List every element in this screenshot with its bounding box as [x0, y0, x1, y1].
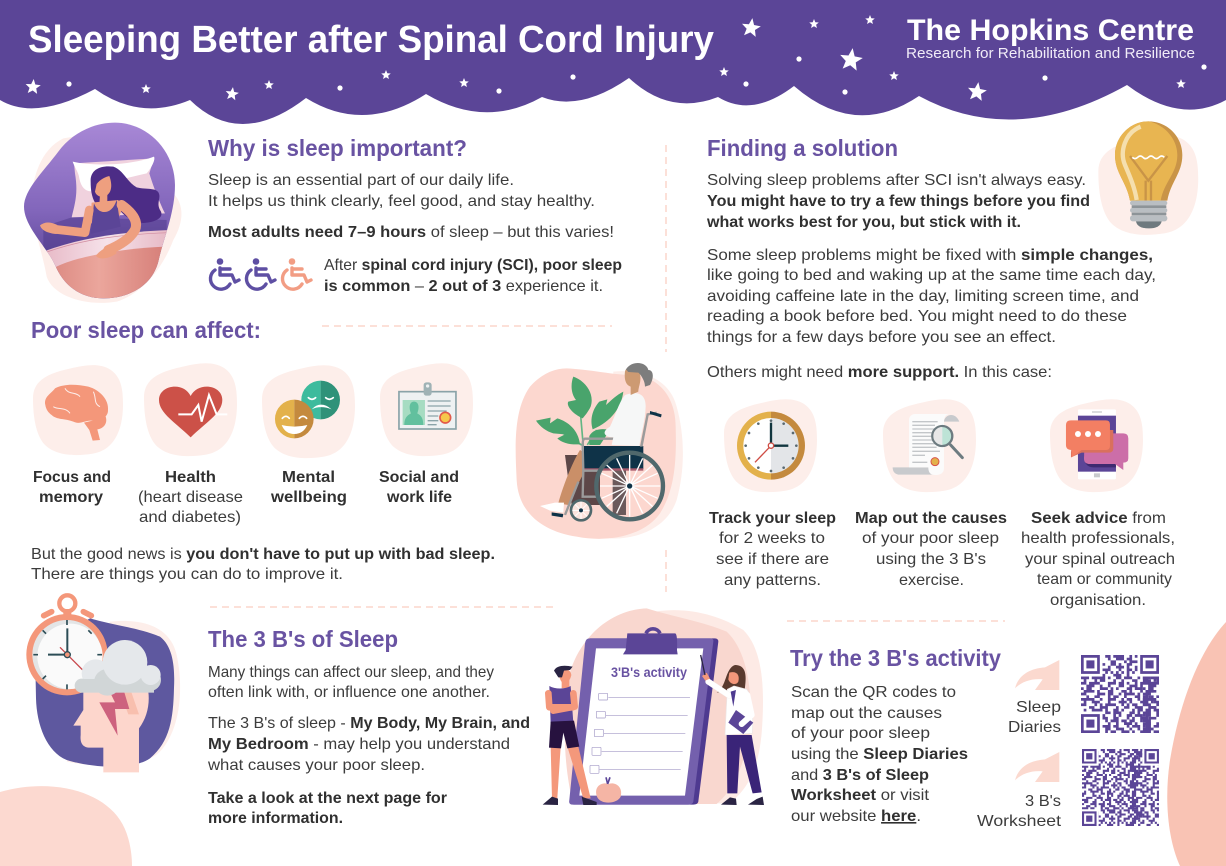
logo: The Hopkins Centre: Research for Rehabilitation and Resilience	[906, 46, 1195, 62]
paragraph 2	[207, 715, 530, 774]
item: map out the causes: exercise.	[899, 572, 964, 589]
logo: The Hopkins Centre: The Hopkins Centre	[907, 14, 1194, 47]
item: map out the causes	[855, 399, 1007, 589]
SCI statement: is common – 2 out of 3 experience it.	[324, 278, 603, 295]
section: finding a solution	[706, 121, 1198, 609]
item: mental wellbeing	[262, 365, 355, 506]
clipboard label: 3'B's activity	[611, 665, 687, 680]
item: seek advice: organisation.	[1050, 592, 1146, 609]
item: track your sleep: any patterns.	[724, 572, 821, 589]
good news text: There are things you can do to improve it.	[31, 566, 343, 583]
title: Sleeping Better after Spinal Cord Injury	[28, 19, 714, 61]
paragraph 3: Take a look at the next page for	[208, 790, 447, 807]
QR: 3 B's worksheet: Worksheet	[977, 813, 1062, 830]
paragraph 2: what causes your poor sleep.	[207, 757, 425, 774]
item: focus and memory: memory	[39, 489, 103, 506]
item: health: (heart disease	[138, 489, 243, 506]
item: health: and diabetes)	[139, 509, 241, 526]
item: map out the causes: of your poor sleep	[862, 530, 999, 547]
instructions: Scan the QR codes to	[791, 684, 956, 701]
item: map out the causes: using the 3 B's	[876, 551, 986, 568]
item: mental wellbeing: Mental	[282, 469, 335, 486]
instructions: using the Sleep Diaries	[791, 746, 968, 763]
simple changes text	[707, 247, 1156, 346]
icons: 2 of 3 wheelchair users	[210, 258, 311, 289]
QR: 3 B's worksheet: 3 B's	[1025, 793, 1061, 810]
heading: Why is sleep important?	[208, 135, 467, 161]
simple changes text: like going to bed and waking up at the same time each day,	[707, 267, 1156, 284]
intro text: Sleep is an essential part of our daily life.	[208, 172, 514, 189]
section: the 3 B's of sleep	[207, 626, 530, 827]
paragraph 1: often link with, or influence one another.	[208, 684, 490, 701]
intro text: what works best for you, but stick with it.	[706, 214, 1021, 231]
item: focus and memory	[33, 365, 123, 506]
good news text: But the good news is you don't have to put up with bad sleep.	[31, 546, 495, 563]
section: why is sleep important	[208, 135, 622, 295]
more support text: Others might need more support. In this case:	[707, 364, 1052, 381]
logo: The Hopkins Centre	[906, 14, 1195, 62]
QR: 3 B's worksheet	[977, 749, 1159, 826]
item: map out the causes: Map out the causes	[855, 510, 1007, 527]
SCI statement: After spinal cord injury (SCI), poor sleep	[324, 257, 622, 274]
item: social and work life	[379, 363, 473, 506]
item: seek advice: Seek advice from	[1031, 510, 1166, 527]
instructions: map out the causes	[791, 705, 942, 722]
paragraph 1: Many things can affect our sleep, and they	[208, 664, 494, 681]
simple changes text: avoiding caffeine late in the day, limiting screen time, and	[707, 288, 1139, 305]
illustration: stopwatch and head with storm cloud	[26, 595, 180, 772]
item: track your sleep	[709, 399, 836, 589]
simple changes text: reading a book before bed. You might need to do these	[707, 308, 1127, 325]
item: mental wellbeing: wellbeing	[270, 489, 347, 506]
item: track your sleep: for 2 weeks to	[719, 530, 825, 547]
item: seek advice: your spinal outreach	[1025, 551, 1175, 568]
stars and dots	[25, 15, 1207, 101]
heading: The 3 B's of Sleep	[208, 626, 398, 652]
paragraph 3	[208, 790, 447, 827]
item: seek advice: health professionals,	[1021, 530, 1175, 547]
item: social and work life: Social and	[379, 469, 459, 486]
intro text: Most adults need 7–9 hours of sleep – but this varies!	[208, 224, 614, 241]
simple changes text: things for a few days before you see an effect.	[707, 329, 1056, 346]
intro text	[706, 172, 1090, 231]
illustration: woman in wheelchair	[516, 363, 683, 539]
instructions: our website here.	[791, 808, 921, 825]
item: health	[138, 363, 243, 526]
simple changes text: Some sleep problems might be fixed with simple changes,	[707, 247, 1153, 264]
heading: Poor sleep can affect:	[31, 317, 261, 343]
SCI statement	[324, 257, 622, 295]
illustration: woman sleeping	[24, 123, 181, 310]
paragraph 3: more information.	[208, 810, 343, 827]
section: poor sleep can affect	[31, 317, 495, 583]
item: health: Health	[165, 469, 216, 486]
item: seek advice: team or community	[1037, 571, 1172, 588]
intro text	[208, 172, 614, 241]
item: seek advice	[1021, 399, 1175, 609]
section: try the 3 B's activity	[790, 649, 1159, 826]
header banner	[0, 0, 1226, 124]
illustration: clipboard activity with two people	[543, 608, 764, 805]
good news text	[31, 546, 495, 583]
heading: Try the 3 B's activity	[790, 645, 1001, 671]
intro text: It helps us think clearly, feel good, and stay healthy.	[208, 193, 595, 210]
instructions	[791, 684, 968, 825]
item: track your sleep: see if there are	[716, 551, 829, 568]
instructions: and 3 B's of Sleep	[791, 767, 929, 784]
paragraph 2: My Bedroom - may help you understand	[208, 736, 510, 753]
instructions: Worksheet or visit	[791, 787, 930, 804]
paragraph 1	[208, 664, 494, 701]
intro text: You might have to try a few things before you find	[707, 193, 1090, 210]
paragraph 2: The 3 B's of sleep - My Body, My Brain, and	[208, 715, 530, 732]
instructions: of your poor sleep	[791, 725, 930, 742]
icon: light bulb	[1098, 121, 1198, 235]
intro text: Solving sleep problems after SCI isn't always easy.	[707, 172, 1086, 189]
decorative corners	[0, 622, 1226, 866]
QR: sleep diaries: Diaries	[1008, 719, 1061, 736]
item: track your sleep: Track your sleep	[709, 510, 836, 527]
item: social and work life: work life	[386, 489, 452, 506]
QR: sleep diaries	[1009, 655, 1159, 733]
item: focus and memory: Focus and	[33, 469, 111, 486]
heading: Finding a solution	[707, 135, 898, 161]
QR: sleep diaries: Sleep	[1016, 699, 1061, 716]
